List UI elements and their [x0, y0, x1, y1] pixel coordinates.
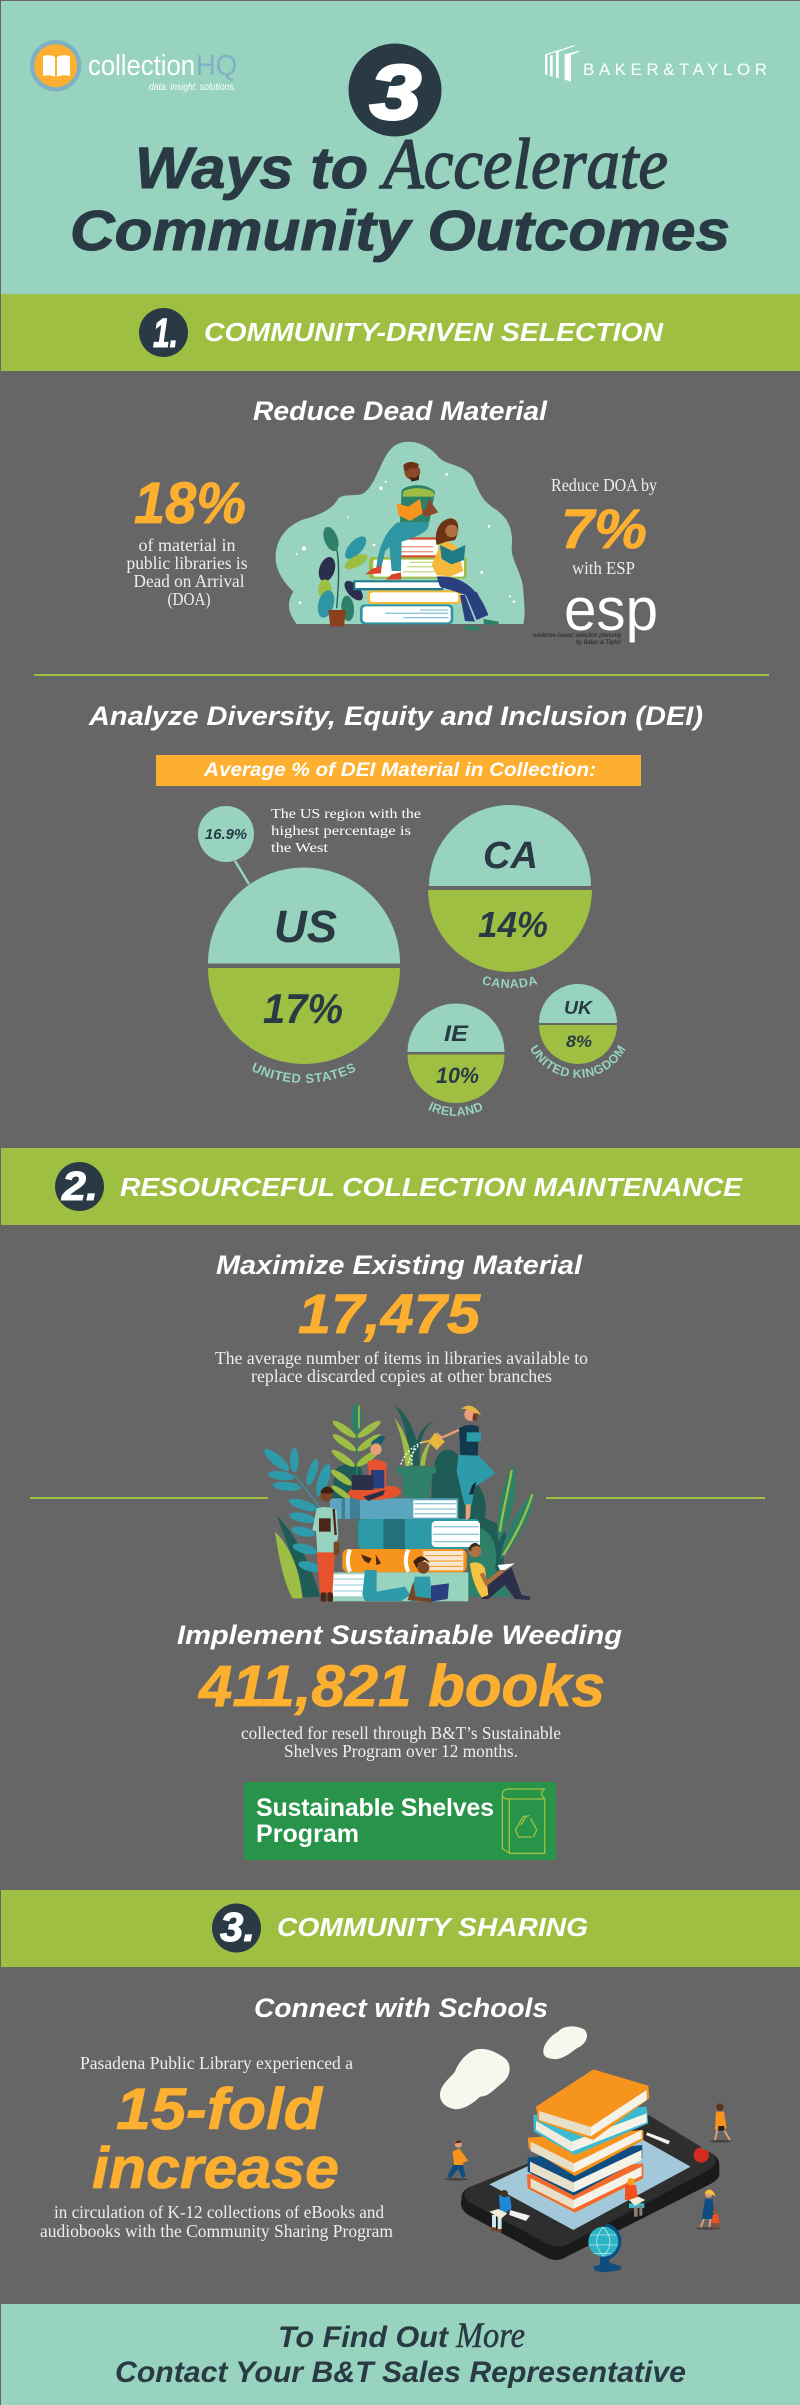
callout: West region — [198, 806, 421, 884]
circle: Ireland: IRELAND — [428, 1102, 482, 1116]
person walking left — [445, 2140, 468, 2181]
circle: UK: UNITED KINGDOM — [531, 1044, 626, 1078]
logo: collectionHQ: HQ — [196, 50, 237, 82]
parent and child — [696, 2189, 720, 2230]
stat: 17,475: 17,475 — [298, 1282, 481, 1345]
stat: 15-fold increase: increase — [92, 2136, 339, 2201]
call to action: Contact Your B&T Sales Representative — [115, 2356, 686, 2389]
stat: 411,821 books: 411,821 books — [198, 1654, 605, 1719]
circle: UK: UK — [564, 998, 594, 1018]
circle: Canada: 14% — [478, 904, 548, 945]
callout: West region: The US region with the — [271, 807, 421, 822]
title: Accelerate — [379, 124, 668, 204]
logo: Baker & Taylor: BAKER&TAYLOR — [583, 60, 767, 79]
heading: maximize existing material: Maximize Existing Material — [216, 1250, 583, 1280]
call to action: More — [455, 2315, 525, 2355]
stat: 15-fold increase: in circulation of K-12 collections of eBooks and — [54, 2202, 384, 2222]
stat: 15-fold increase — [40, 2053, 393, 2241]
stat: 18 percent dead on arrival: (DOA) — [168, 589, 211, 609]
circle: Canada: CANADA — [482, 976, 538, 988]
heading: connect with schools: Connect with Schools — [254, 1993, 548, 2023]
circle: US — [208, 868, 400, 1083]
fern — [329, 1404, 383, 1542]
phone — [461, 2115, 719, 2260]
stat: 15-fold increase: audiobooks with the Community Sharing Program — [40, 2221, 393, 2241]
circle: Ireland — [408, 1004, 504, 1116]
circle: UK: 8% — [566, 1032, 592, 1051]
person reading right — [468, 1543, 530, 1600]
stat: 18 percent dead on arrival: public libraries is — [126, 553, 248, 573]
section 3 banner: COMMUNITY SHARING — [277, 1912, 588, 1942]
text: average items description — [215, 1348, 588, 1386]
call to action: To Find Out — [278, 2321, 450, 2354]
logo: Baker & Taylor — [545, 45, 767, 82]
section 3 banner: 3. — [220, 1904, 255, 1950]
callout: West region: highest percentage is — [271, 824, 411, 839]
logo: collectionHQ: data. insight. solutions. — [149, 81, 236, 93]
text: average items description: The average number of items in libraries available to — [215, 1348, 588, 1368]
apple — [694, 2147, 709, 2163]
logo: collectionHQ: collection — [88, 50, 195, 82]
book stack — [527, 2069, 649, 2213]
callout: West region: 16.9% — [205, 826, 247, 843]
text: collected for resell: collected for resell through B&T’s Sustainable — [241, 1723, 561, 1743]
footer panel — [1, 2304, 800, 2405]
person standing left — [312, 1486, 339, 1602]
circle: UK — [531, 984, 626, 1078]
potted plant with watering can — [394, 1405, 445, 1498]
title: Ways to — [135, 136, 368, 201]
circle: Ireland: 10% — [436, 1063, 479, 1088]
plant — [315, 525, 370, 626]
logo: esp: esp — [564, 576, 658, 643]
title: Community Outcomes — [70, 199, 730, 263]
stat: reduce DOA by 7 percent with ESP — [533, 475, 658, 646]
section 2 banner — [1, 1148, 800, 1225]
section 1 banner: 1. — [153, 310, 178, 356]
section 2 banner: RESOURCEFUL COLLECTION MAINTENANCE — [120, 1172, 743, 1202]
circle: US: 17% — [263, 985, 343, 1032]
icon: recycled book — [502, 1789, 545, 1853]
person sitting blue — [489, 2190, 512, 2232]
stat: reduce DOA by 7 percent with ESP: Reduce DOA by — [551, 475, 657, 495]
heading: reduce dead material: Reduce Dead Material — [253, 396, 548, 426]
header panel — [1, 1, 800, 294]
callout: West region: the West — [271, 841, 328, 856]
section 3 banner — [1, 1890, 800, 1967]
stat: 18 percent dead on arrival — [126, 471, 248, 609]
clouds — [440, 2026, 587, 2109]
person lying down — [361, 1554, 449, 1602]
circle: Canada — [428, 805, 592, 988]
badge: sustainable shelves program: Program — [256, 1820, 359, 1848]
logo: collectionHQ — [30, 40, 237, 93]
call to action — [115, 2315, 686, 2389]
logo: esp: by Baker & Taylor — [576, 639, 622, 646]
circle: Canada: CA — [483, 835, 538, 877]
stat: 18 percent dead on arrival: of material in — [138, 535, 236, 555]
section 1 banner: COMMUNITY-DRIVEN SELECTION — [204, 317, 664, 347]
illustration: people reading on books — [276, 442, 525, 630]
stat: reduce DOA by 7 percent with ESP: 7% — [561, 497, 647, 560]
man reading — [365, 462, 438, 580]
stat: 18 percent dead on arrival: 18% — [134, 471, 246, 536]
stat: 18 percent dead on arrival: Dead on Arrival — [134, 571, 245, 591]
banner: average DEI — [156, 755, 641, 786]
title — [70, 124, 730, 263]
stat: 15-fold increase: Pasadena Public Library experienced a — [80, 2053, 353, 2073]
icon: number 3 badge: 3 — [370, 50, 421, 136]
heading: analyze DEI: Analyze Diversity, Equity and Inclusion (DEI) — [88, 701, 703, 731]
circle: US: UNITED STATES — [252, 1062, 356, 1083]
background foliage — [275, 1450, 535, 1598]
globe — [588, 2223, 622, 2272]
heading: implement sustainable weeding: Implement Sustainable Weeding — [177, 1620, 623, 1650]
stat: reduce DOA by 7 percent with ESP: with ESP — [572, 558, 635, 578]
text: collected for resell — [241, 1723, 561, 1761]
circle: US: US — [274, 901, 337, 952]
section 2 banner: 2. — [61, 1163, 98, 1209]
logo: esp: evidence-based selection planning — [533, 632, 621, 639]
person with bag — [710, 2103, 732, 2143]
text: collected for resell: Shelves Program over 12 months. — [284, 1741, 518, 1761]
book stack — [353, 537, 467, 624]
circle: Ireland: IE — [444, 1021, 470, 1046]
person sitting orange — [625, 2178, 645, 2217]
woman reading — [432, 518, 499, 630]
teal branch — [261, 1446, 334, 1574]
badge: sustainable shelves program: Sustainable Shelves — [256, 1794, 494, 1822]
person with laptop — [348, 1436, 401, 1501]
book stack — [330, 1498, 480, 1601]
text: average items description: replace discarded copies at other branches — [251, 1366, 552, 1386]
icon: number 3 badge — [348, 44, 442, 136]
banner: average DEI: Average % of DEI Material in Collection: — [203, 759, 596, 781]
illustration: books on smartphone — [440, 2026, 732, 2272]
person watering — [437, 1406, 496, 1520]
illustration: community around book stack — [261, 1404, 535, 1602]
chart: DEI circles — [198, 805, 626, 1116]
badge: sustainable shelves program — [244, 1782, 556, 1860]
section 1 banner — [1, 294, 800, 371]
stat: 15-fold increase: 15-fold — [116, 2077, 324, 2142]
